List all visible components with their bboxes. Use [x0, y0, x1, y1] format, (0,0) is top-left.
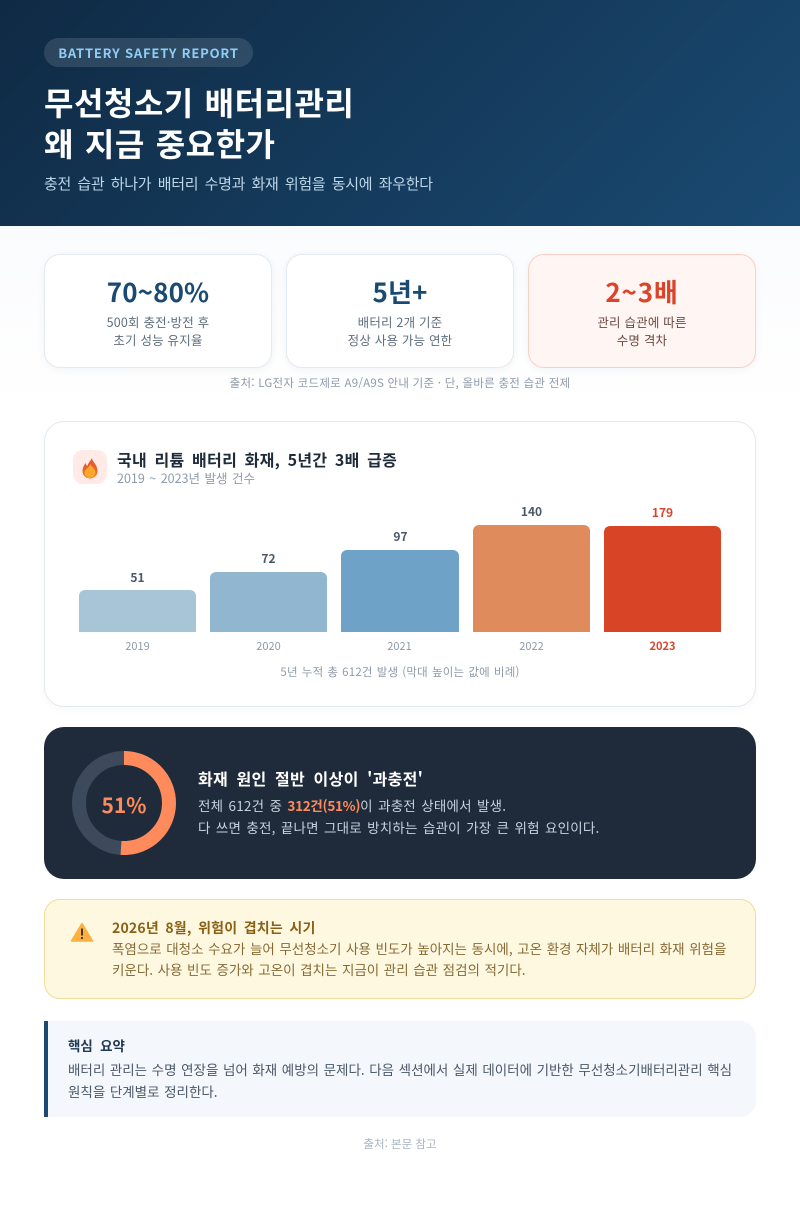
- stat card: retention: 초기 성능 유지율: [113, 330, 203, 349]
- warning text: 키운다. 사용 빈도 증가와 고온이 겹치는 지금이 관리 습관 점검의 적기다.: [112, 959, 526, 979]
- report tag: [44, 38, 253, 67]
- bar 2019: 51: [130, 569, 145, 586]
- title: 왜 지금 중요한가: [44, 120, 276, 166]
- bar 2023: 179: [652, 504, 673, 521]
- source note: 출처: LG전자 코드제로 A9/A9S 안내 기준 · 단, 올바른 충전 습관 전제: [230, 375, 570, 391]
- warning heading: 2026년 8월, 위험이 겹치는 시기: [112, 918, 316, 938]
- bar 2020: 72: [261, 550, 276, 567]
- summary text: [68, 1059, 732, 1101]
- chart subtitle: 2019 ~ 2023년 발생 건수: [117, 468, 255, 487]
- bar 2020: [210, 550, 327, 632]
- stat card: years: 배터리 2개 기준: [358, 312, 442, 331]
- warning text: 폭염으로 대청소 수요가 늘어 무선청소기 사용 빈도가 높아지는 동시에, 고온 환경 자체가 배터리 화재 위험을: [112, 938, 726, 958]
- stat card: retention: 70~80%: [107, 273, 209, 310]
- panel: warning: [44, 899, 756, 999]
- year 2020: 2020: [256, 638, 281, 654]
- title: 무선청소기 배터리관리: [44, 79, 354, 125]
- stat card: years: 5년+: [373, 273, 427, 310]
- year 2019: 2019: [125, 638, 150, 654]
- title: [44, 79, 354, 166]
- donut chart: [72, 751, 176, 855]
- summary heading: 핵심 요약: [68, 1035, 125, 1055]
- stat card: years: [286, 254, 514, 368]
- year 2023: 2023: [650, 638, 675, 654]
- stat card: retention: [44, 254, 272, 368]
- subtitle: 충전 습관 하나가 배터리 수명과 화재 위험을 동시에 좌우한다: [44, 173, 433, 194]
- bar 2022: 140: [521, 503, 542, 520]
- overcharge text: [198, 795, 599, 837]
- chart title: 국내 리튬 배터리 화재, 5년간 3배 급증: [117, 447, 397, 471]
- stat card: lifespan gap: [528, 254, 756, 368]
- stat card: years: 정상 사용 가능 연한: [348, 330, 452, 349]
- footer source: 출처: 본문 참고: [363, 1136, 437, 1152]
- page tint: [0, 226, 800, 406]
- bar chart: [79, 503, 721, 654]
- stat card: lifespan gap: 수명 격차: [617, 330, 667, 349]
- overcharge text: 전체 612건 중 312건(51%)이 과충전 상태에서 발생.: [198, 795, 506, 815]
- bar 2023: [604, 504, 721, 632]
- overcharge text: 다 쓰면 충전, 끝나면 그대로 방치하는 습관이 가장 큰 위험 요인이다.: [198, 817, 599, 837]
- panel: overcharge: [44, 727, 756, 879]
- stat card: lifespan gap: 2~3배: [605, 273, 679, 310]
- bar 2019: [79, 569, 196, 632]
- year 2021: 2021: [387, 638, 412, 654]
- icon: warning: [70, 922, 94, 942]
- panel: fire chart: [44, 421, 756, 707]
- panel: summary: [44, 1021, 756, 1117]
- bar 2022: [473, 503, 590, 632]
- chart footnote: 5년 누적 총 612건 발생 (막대 높이는 값에 비례): [280, 664, 520, 680]
- summary text: 원칙을 단계별로 정리한다.: [68, 1081, 218, 1101]
- bar 2021: 97: [393, 528, 408, 545]
- bar 2021: [341, 528, 459, 632]
- year 2022: 2022: [519, 638, 544, 654]
- overcharge heading: 화재 원인 절반 이상이 '과충전': [198, 766, 423, 790]
- icon: flame: [73, 450, 107, 484]
- warning text: [112, 938, 726, 979]
- stat card: retention: 500회 충전·방전 후: [107, 312, 209, 331]
- header banner: [0, 0, 800, 226]
- report tag: BATTERY SAFETY REPORT: [58, 43, 239, 62]
- stat card: lifespan gap: 관리 습관에 따른: [597, 312, 687, 331]
- summary text: 배터리 관리는 수명 연장을 넘어 화재 예방의 문제다. 다음 섹션에서 실제 데이터에 기반한 무선청소기배터리관리 핵심: [68, 1059, 732, 1079]
- donut chart: 51%: [101, 790, 147, 820]
